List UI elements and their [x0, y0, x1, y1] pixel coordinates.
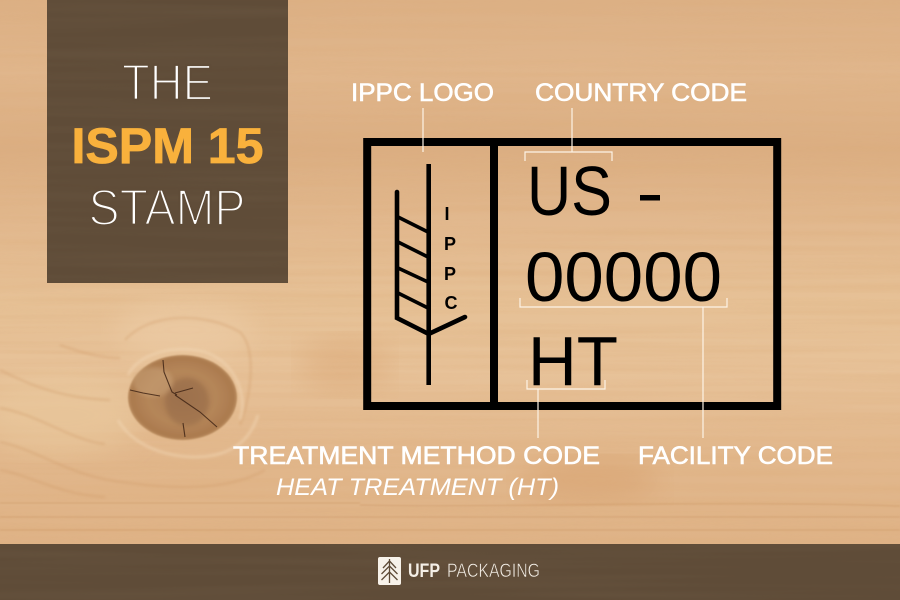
- title line: ISPM 15: ISPM 15: [72, 118, 264, 174]
- icon: UFP tree logo: [378, 557, 401, 585]
- footer brand text: [408, 561, 540, 582]
- stamp text: US: US: [527, 152, 612, 230]
- label: heat treatment: HEAT TREATMENT (HT): [276, 474, 559, 501]
- label: IPPC logo: IPPC LOGO: [351, 79, 494, 107]
- title line: STAMP: STAMP: [88, 179, 246, 236]
- logo letters: P: [444, 264, 456, 284]
- icon: IPPC wheat logo: [397, 164, 465, 385]
- stamp frame: [367, 142, 777, 406]
- wood knot: [128, 355, 237, 440]
- label: facility code: FACILITY CODE: [638, 442, 833, 470]
- logo letters: P: [444, 234, 456, 254]
- title line: THE: THE: [122, 54, 213, 111]
- footer brand text: UFP: [408, 561, 440, 582]
- stamp text: 00000: 00000: [525, 238, 722, 316]
- title panel: [47, 0, 288, 283]
- footer bar: [0, 544, 900, 600]
- callout lines and brackets: [423, 108, 727, 438]
- stamp text: dash: [640, 195, 660, 200]
- label: country code: COUNTRY CODE: [535, 79, 747, 107]
- stamp text: HT: HT: [528, 322, 618, 400]
- logo letters: I: [444, 204, 450, 224]
- logo letters: C: [444, 293, 458, 313]
- footer brand text: PACKAGING: [447, 561, 540, 582]
- logo letters: [444, 204, 458, 313]
- label: treatment method code: TREATMENT METHOD CODE: [233, 442, 600, 470]
